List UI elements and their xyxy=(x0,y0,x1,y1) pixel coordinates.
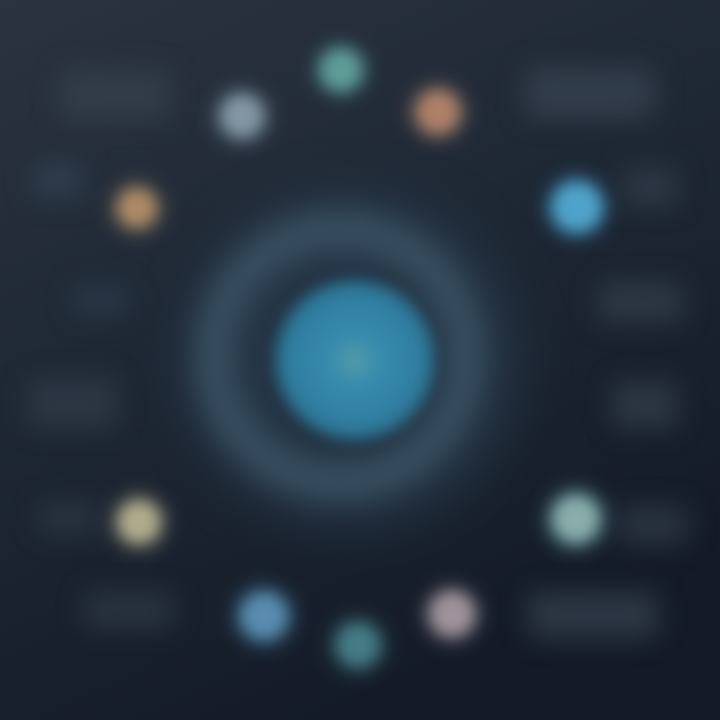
label: top right xyxy=(525,68,655,118)
node: bottom left blue xyxy=(231,583,297,649)
blurred label blocks xyxy=(28,68,688,638)
node: upper right orange xyxy=(407,81,469,143)
label: lower right xyxy=(618,506,688,544)
label: lower middle left xyxy=(28,378,118,428)
node: lower left beige xyxy=(108,491,170,553)
node: right blue xyxy=(544,174,610,240)
label: lower left xyxy=(38,502,98,534)
central diagram xyxy=(180,190,520,530)
node: bottom teal xyxy=(327,614,389,676)
node: bottom right pink xyxy=(421,583,483,645)
core centre dot xyxy=(341,348,369,376)
label: upper left xyxy=(32,162,84,198)
label: lower middle right xyxy=(612,382,678,428)
label: middle left xyxy=(72,285,130,315)
label: middle right xyxy=(598,282,683,322)
label: top left xyxy=(60,70,170,120)
outer glow xyxy=(180,190,520,530)
node: top teal xyxy=(312,41,370,99)
core circle xyxy=(275,280,435,440)
label: bottom left xyxy=(84,592,174,628)
node: upper left grey xyxy=(211,85,273,147)
node: left orange xyxy=(108,179,166,237)
outer ring xyxy=(214,230,466,482)
orbiting nodes xyxy=(108,41,610,676)
label: upper right xyxy=(622,168,678,206)
node: lower right pale teal xyxy=(543,486,609,552)
label: bottom right xyxy=(528,592,658,638)
